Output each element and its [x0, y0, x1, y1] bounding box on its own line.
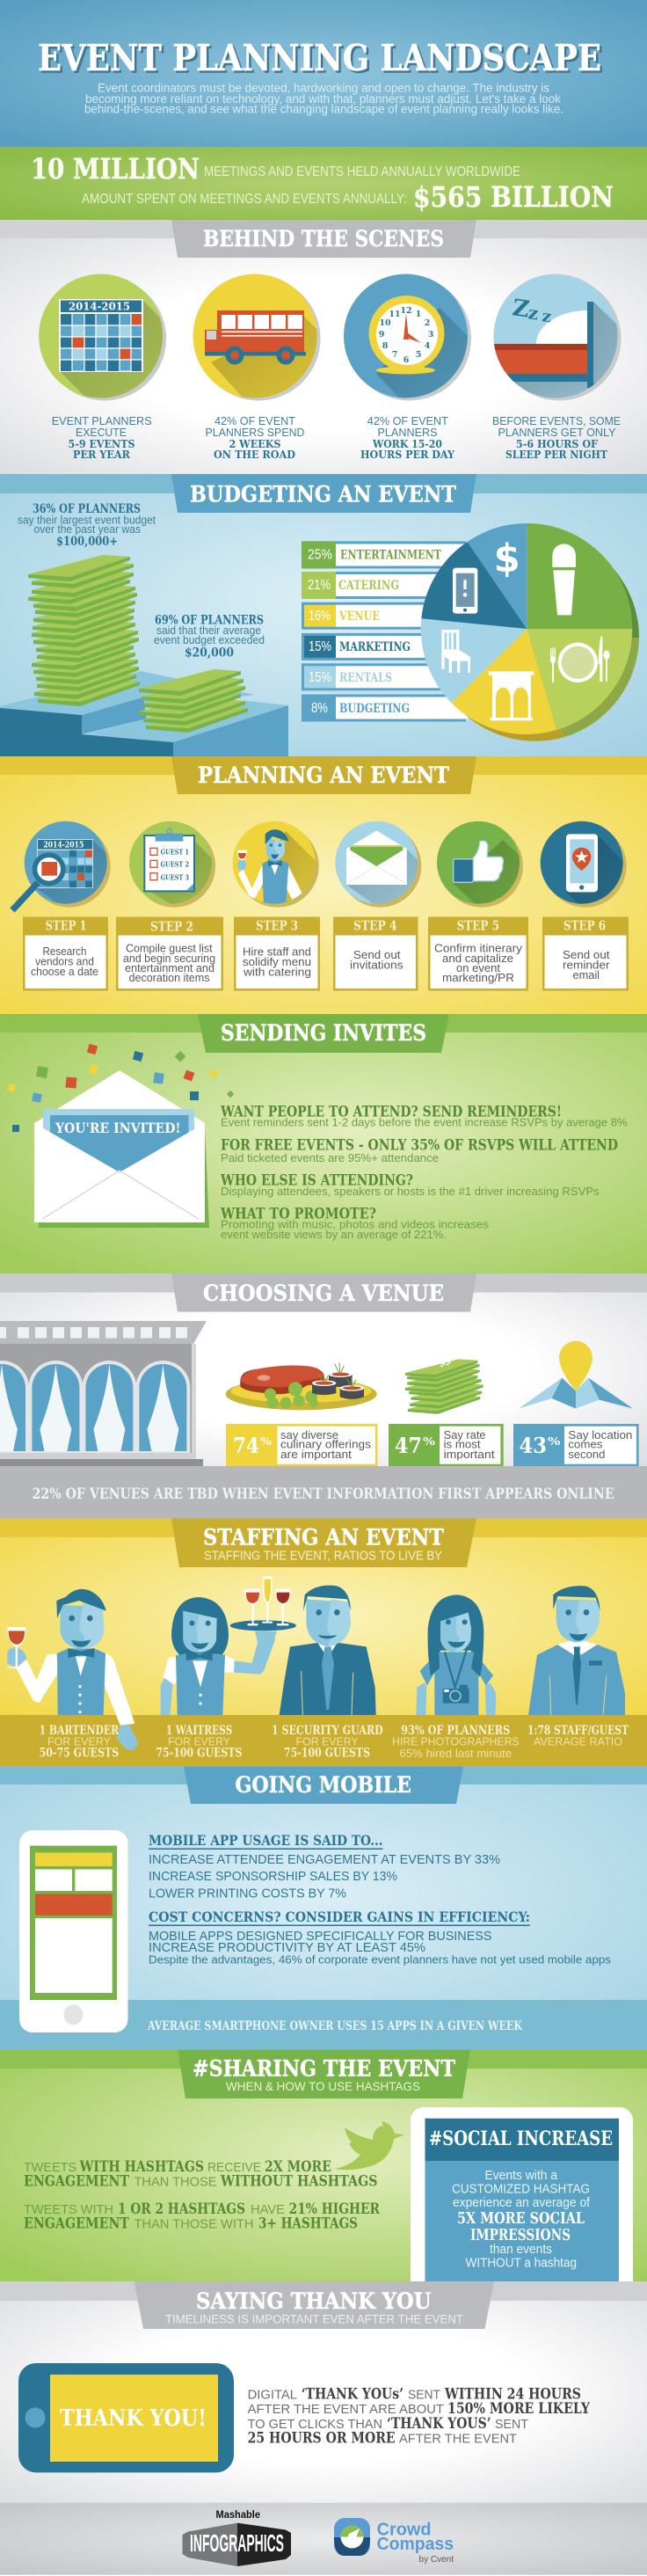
caption: waitress ratio: FOR EVERY — [168, 1735, 230, 1748]
text: hashtag engagement: 21% HIGHER — [289, 2200, 381, 2218]
icon: clock circle: 7 — [392, 350, 397, 360]
stat: culinary: are important — [280, 1448, 352, 1461]
caption: hours per day: PLANNERS — [378, 426, 438, 439]
icon: clock circle: 12 — [400, 306, 412, 316]
heading: planning: PLANNING AN EVENT — [198, 763, 449, 789]
icon: bed circle: Z — [511, 295, 531, 324]
panel: headline stats: MEETINGS AND EVENTS HELD ANNUALLY WORLDWIDE — [204, 164, 520, 179]
caption: on the road: 42% OF EVENT — [214, 414, 295, 427]
text: invite tips: WHO ELSE IS ATTENDING? — [220, 1171, 413, 1188]
text: cost concerns: COST CONCERNS? CONSIDER GAINS IN EFFICIENCY: — [149, 1908, 530, 1925]
step 4: invitations — [350, 959, 403, 971]
step 4 — [333, 916, 418, 990]
panel: footer — [0, 2503, 647, 2575]
caption: security ratio: FOR EVERY — [296, 1735, 359, 1748]
heading: budgeting — [171, 474, 476, 513]
icon: money stack — [405, 1354, 483, 1414]
icon: clock circle: 2 — [425, 318, 430, 328]
stat: location: comes — [568, 1438, 603, 1451]
money stack: small — [0, 669, 248, 791]
legend row: entertainment: 25% — [308, 548, 332, 563]
panel: going mobile — [0, 1766, 647, 2049]
stat: culinary: 74 — [233, 1433, 259, 1458]
figure: waitress — [161, 1576, 296, 1715]
pie slice: marketing — [421, 542, 527, 629]
logo: mashable infographics: INFOGRAPHICS — [190, 2529, 284, 2557]
icon: guest list clipboard: GUEST 3 — [161, 872, 189, 881]
step 1: Research — [42, 945, 87, 958]
panel: social increase tablet — [411, 2107, 633, 2281]
intro text — [84, 82, 563, 116]
icon: clock circle: 11 — [389, 310, 401, 319]
step 2: Compile guest list — [126, 943, 213, 955]
panel: behind the scenes — [0, 220, 647, 474]
panel: social increase tablet: WITHOUT a hashtag — [466, 2256, 577, 2271]
caption: sleep — [492, 414, 621, 461]
text: thank you timing: ‘THANK YOUs’ — [302, 2386, 403, 2403]
text: app usage benefits: LOWER PRINTING COSTS BY 7% — [149, 1886, 346, 1901]
text: cost concerns — [149, 1908, 611, 1967]
caption: sleep: BEFORE EVENTS, SOME — [492, 414, 621, 427]
step 3: STEP 3 — [256, 917, 298, 933]
panel: social increase tablet: experience an average of — [453, 2195, 591, 2210]
text: 69 percent of planners: 69% OF PLANNERS — [155, 614, 264, 628]
icon: clock circle — [344, 274, 471, 401]
panel: saying thank you — [0, 2281, 647, 2503]
logo: mashable infographics: Mashable — [216, 2508, 260, 2521]
heading: choosing a venue — [171, 1273, 476, 1312]
step 4: STEP 4 — [353, 917, 397, 933]
legend row: rentals: 15% — [309, 670, 331, 685]
text: 36 percent of planners: 36% OF PLANNERS — [33, 502, 141, 516]
icon: bed circle: z — [527, 302, 540, 325]
caption: hours per day — [360, 414, 455, 461]
icon: clock circle: 5 — [416, 350, 421, 360]
legend row: entertainment: ENTERTAINMENT — [340, 549, 441, 563]
heading: sending invites: SENDING INVITES — [221, 1020, 426, 1047]
text: cost concerns: INCREASE PRODUCTIVITY BY AT LEAST 45% — [149, 1940, 425, 1955]
panel: planning an event — [0, 756, 647, 1014]
caption: events per year: EVENT PLANNERS — [52, 414, 152, 427]
text: hashtag engagement: 2X MORE — [265, 2158, 331, 2176]
heading: going mobile: GOING MOBILE — [236, 1772, 411, 1799]
panel: headline stats: $565 BILLION — [413, 180, 614, 214]
heading: planning — [171, 756, 476, 794]
stat: location: second — [568, 1448, 605, 1461]
heading: sharing: #SHARING THE EVENT — [193, 2056, 455, 2083]
stat: location: 43 — [519, 1433, 547, 1458]
caption: staff guest ratio — [527, 1724, 629, 1748]
text: thank you timing — [248, 2386, 590, 2447]
panel: headline stats — [0, 147, 647, 220]
heading: saying thank you — [134, 2281, 494, 2329]
legend row: entertainment — [302, 541, 468, 568]
caption: events per year — [52, 414, 152, 461]
icon: invitation envelope — [34, 1070, 209, 1228]
icon: building — [489, 671, 534, 720]
logo: crowd compass — [334, 2518, 454, 2565]
text: invite tips: WANT PEOPLE TO ATTEND? SEND REMINDERS! — [220, 1104, 562, 1120]
stat: rate: Say rate — [444, 1428, 486, 1441]
icon: guest list clipboard: GUEST 2 — [161, 860, 189, 869]
caption: security ratio: 75-100 GUESTS — [284, 1746, 370, 1760]
panel: social increase tablet: CUSTOMIZED HASHTAG — [452, 2182, 590, 2197]
text: thank you timing: WITHIN 24 HOURS — [444, 2386, 581, 2403]
heading: sharing — [178, 2049, 470, 2098]
text: hashtag engagement: WITHOUT HASHTAGS — [220, 2173, 378, 2191]
caption: security ratio — [272, 1724, 383, 1760]
icon: bed circle — [494, 274, 621, 401]
caption: staff guest ratio: AVERAGE RATIO — [534, 1735, 622, 1748]
pie slice: budgeting — [468, 523, 527, 629]
step 3: Hire staff and — [243, 946, 311, 959]
text: hashtag engagement: TWEETS — [24, 2160, 76, 2175]
text: 36 percent of planners: over the past year was — [33, 523, 141, 536]
text: hashtag engagement: THAN THOSE — [134, 2175, 216, 2190]
icon: clock circle: 6 — [403, 355, 410, 365]
icon: dollar: $ — [494, 536, 520, 580]
icon: invitation envelope — [335, 821, 422, 908]
caption: on the road: 2 WEEKS — [229, 437, 281, 450]
stat: location: Say location — [568, 1428, 632, 1441]
heading: sharing: WHEN & HOW TO USE HASHTAGS — [226, 2079, 420, 2093]
step 3 — [234, 916, 320, 990]
text: thank you timing: AFTER THE EVENT — [399, 2431, 517, 2447]
text: hashtag engagement: 3+ HASHTAGS — [258, 2215, 358, 2232]
text: thank you timing: DIGITAL — [248, 2388, 297, 2403]
icon: calendar circle — [39, 274, 167, 401]
text: hashtag engagement: WITH HASHTAGS — [79, 2158, 204, 2176]
stat: location: % — [548, 1435, 561, 1448]
icon: research calendar — [10, 821, 111, 913]
icon: calendar circle: 2014-2015 — [69, 301, 130, 313]
heading: staffing: STAFFING THE EVENT, RATIOS TO LIVE BY — [204, 1548, 442, 1564]
icon: twitter bird — [335, 2121, 404, 2170]
text: hashtag engagement: TWEETS WITH — [24, 2202, 113, 2217]
step 5: on event — [456, 962, 501, 974]
step 2: entertainment and — [125, 962, 214, 974]
invited label: YOU'RE INVITED! — [55, 1120, 181, 1136]
text: cost concerns: MOBILE APPS DESIGNED SPECIFICALLY FOR BUSINESS — [149, 1929, 492, 1944]
steps illustration — [0, 671, 288, 756]
icon: thank you phone: THANK YOU! — [60, 2405, 207, 2432]
legend row: venue: 16% — [309, 609, 331, 624]
legend row: rentals: RENTALS — [339, 671, 392, 685]
caption: hours per day: HOURS PER DAY — [360, 448, 455, 461]
legend row: marketing: 15% — [309, 639, 331, 654]
text: thank you timing: SENT — [495, 2417, 528, 2432]
caption: security ratio: 1 SECURITY GUARD — [272, 1724, 383, 1738]
panel: social increase tablet: Events with a — [485, 2168, 558, 2183]
panel: budgeting an event — [0, 474, 647, 791]
step 2: decoration items — [128, 972, 209, 984]
text: 36 percent of planners — [18, 502, 156, 549]
stat: culinary: % — [260, 1435, 273, 1448]
legend row: venue: VENUE — [338, 609, 380, 624]
text: 69 percent of planners: said that their average — [156, 624, 261, 637]
step 2: STEP 2 — [150, 919, 193, 935]
step 2 — [116, 916, 223, 990]
legend row: catering: 21% — [308, 578, 331, 593]
panel: headline stats: AMOUNT SPENT ON MEETINGS AND EVENTS ANNUALLY: — [82, 192, 407, 207]
step 5: STEP 5 — [457, 917, 499, 933]
text: invite tips — [220, 1104, 628, 1241]
icon: clock circle: 3 — [428, 330, 433, 339]
legend row: budgeting: 8% — [311, 701, 328, 716]
legend row: catering: CATERING — [338, 579, 399, 593]
panel: headline stats: 10 MILLION — [31, 152, 200, 186]
caption: waitress ratio — [156, 1724, 242, 1760]
icon: research calendar: 2014-2015 — [43, 841, 84, 850]
stat: rate: % — [423, 1435, 436, 1448]
caption: events per year: 5-9 EVENTS — [69, 437, 135, 450]
legend row: rentals — [302, 663, 468, 690]
legend row: budgeting — [302, 695, 468, 721]
caption: hours per day: 42% OF EVENT — [367, 414, 448, 427]
icon: thank you phone — [18, 2363, 234, 2472]
text: hashtag engagement: ENGAGEMENT — [24, 2173, 129, 2191]
step 1: STEP 1 — [46, 917, 87, 933]
figure: security guard — [280, 1586, 376, 1715]
legend row: catering — [302, 572, 468, 599]
heading: saying thank you: SAYING THANK YOU — [196, 2288, 431, 2315]
text: app usage benefits: INCREASE ATTENDEE ENGAGEMENT AT EVENTS BY 33% — [149, 1852, 500, 1867]
heading: going mobile — [184, 1766, 463, 1804]
legend row: marketing — [302, 633, 468, 660]
panel: social increase tablet: #SOCIAL INCREASE — [429, 2127, 613, 2150]
icon: clock circle: 1 — [416, 310, 421, 319]
stat: culinary: say diverse — [280, 1428, 338, 1441]
caption: events per year: PER YEAR — [73, 448, 131, 461]
caption: photographers: 65% hired last minute — [399, 1748, 512, 1760]
step 6: reminder — [563, 959, 610, 971]
icon: clock circle: 8 — [382, 341, 389, 351]
heading: budgeting: BUDGETING AN EVENT — [190, 482, 456, 508]
panel: header — [0, 0, 647, 147]
intro text: becoming more reliant on technology, and with that, planners must adjust. Let's take a look — [85, 92, 561, 106]
stat: culinary — [226, 1424, 378, 1466]
text: thank you timing: TO GET CLICKS THAN — [248, 2417, 382, 2432]
step 5 — [428, 916, 528, 990]
text: hashtag engagement: THAN THOSE WITH — [134, 2216, 253, 2232]
text: thank you timing: AFTER THE EVENT ARE ABOUT — [248, 2402, 444, 2417]
stat: location — [513, 1424, 639, 1466]
step 1 — [23, 916, 108, 990]
pie slice: venue — [451, 629, 556, 734]
heading: choosing a venue: CHOOSING A VENUE — [203, 1281, 444, 1307]
panel: sharing the event — [0, 2049, 647, 2281]
step 5: Confirm itinerary — [434, 943, 523, 955]
icon: pie glyphs — [441, 536, 610, 720]
icon: bed circle: z — [541, 307, 552, 326]
legend: budget categories — [302, 541, 468, 721]
icon: plate and cutlery — [550, 636, 610, 682]
text: 69 percent of planners: $20,000 — [185, 646, 234, 660]
stat: rate: important — [444, 1448, 495, 1461]
step 1: choose a date — [31, 966, 98, 978]
intro text: Event coordinators must be devoted, hardworking and open to change. The industry is — [98, 82, 549, 95]
figure: photographer — [416, 1594, 496, 1715]
callout: venues TBD — [0, 1466, 647, 1519]
icon: guest list clipboard: GUEST 1 — [161, 848, 189, 857]
text: thank you timing: 25 HOURS OR MORE — [248, 2429, 396, 2447]
text: hashtag engagement: RECEIVE — [207, 2160, 261, 2175]
icon: guest list clipboard — [129, 821, 215, 908]
stat: rate: 47 — [395, 1433, 422, 1458]
caption: bartender ratio: 1 BARTENDER — [40, 1724, 120, 1738]
panel: choosing a venue — [0, 1273, 647, 1519]
step 6 — [542, 916, 629, 990]
text: invite tips: WHAT TO PROMOTE? — [220, 1206, 376, 1222]
text: invite tips: Promoting with music, photos and videos increases — [221, 1219, 489, 1231]
step 1: vendors and — [35, 955, 94, 967]
caption: waitress ratio: 1 WAITRESS — [166, 1724, 232, 1738]
stat: rate — [389, 1424, 504, 1466]
step 6: Send out — [563, 949, 610, 961]
heading: behind the scenes: BEHIND THE SCENES — [203, 226, 444, 252]
pie slice: catering — [527, 629, 632, 730]
icon: food plate — [226, 1362, 377, 1410]
text: invite tips: Event reminders sent 1-2 days before the event increase RSVPs by average 8% — [221, 1116, 628, 1128]
icon: map pin — [519, 1341, 633, 1409]
icon: microphone — [552, 544, 576, 615]
step 5: and capitalize — [442, 952, 513, 965]
caption: bartender ratio: FOR EVERY — [47, 1735, 111, 1748]
text: 69 percent of planners: event budget exceeded — [154, 634, 265, 646]
caption: on the road: PLANNERS SPEND — [206, 426, 304, 439]
heading: staffing — [171, 1518, 476, 1567]
text: thank you timing: SENT — [408, 2388, 440, 2403]
step 2: and begin securing — [123, 952, 215, 965]
caption: sleep: SLEEP PER NIGHT — [505, 448, 608, 461]
icon: app phone — [19, 1830, 128, 2032]
step 5: marketing/PR — [442, 972, 514, 984]
heading: saying thank you: TIMELINESS IS IMPORTANT EVEN AFTER THE EVENT — [165, 2312, 463, 2326]
caption: on the road — [206, 414, 304, 461]
panel: social increase tablet: than events — [490, 2242, 552, 2257]
step 4: Send out — [353, 949, 401, 961]
legend row: budgeting: BUDGETING — [339, 702, 410, 716]
logo: crowd compass: by Cvent — [418, 2554, 454, 2565]
intro text: behind-the-scenes, and see what the changing landscape of event planning really looks like. — [84, 103, 563, 116]
step 6: STEP 6 — [563, 917, 606, 933]
caption: photographers: HIRE PHOTOGRAPHERS — [392, 1735, 520, 1748]
icon: money stack: $$ — [439, 1354, 454, 1370]
caption: bartender ratio: 50-75 GUESTS — [40, 1746, 119, 1760]
text: thank you timing: ‘THANK YOUS’ — [387, 2415, 491, 2432]
band: staffing stats background — [0, 1715, 647, 1766]
pie chart: budget share — [421, 523, 639, 741]
caption: waitress ratio: 75-100 GUESTS — [156, 1746, 242, 1760]
panel: sending invites — [0, 1014, 647, 1273]
panel: staffing an event — [0, 1518, 647, 1766]
caption: on the road: ON THE ROAD — [214, 448, 295, 461]
text: app usage benefits — [149, 1832, 500, 1901]
caption: sleep: PLANNERS GET ONLY — [498, 426, 616, 439]
panel: social increase tablet: 5X MORE SOCIAL — [457, 2210, 585, 2228]
caption: events per year: EXECUTE — [76, 426, 127, 439]
text: 36 percent of planners: say their largest event budget — [18, 514, 156, 526]
heading: sending invites — [198, 1014, 449, 1053]
text: thank you timing: 150% MORE LIKELY — [447, 2400, 590, 2417]
logo: crowd compass: Crowd — [377, 2521, 432, 2540]
text: app usage benefits: MOBILE APP USAGE IS SAID TO... — [149, 1832, 383, 1849]
step 6: email — [573, 969, 600, 982]
caption: bartender ratio — [40, 1724, 120, 1760]
logo: crowd compass: Compass — [377, 2535, 454, 2554]
panel: social increase tablet: IMPRESSIONS — [470, 2227, 571, 2244]
heading: behind the scenes — [171, 220, 476, 258]
pie slice: entertainment — [527, 523, 632, 629]
step 3: with catering — [243, 966, 311, 978]
icon: clock circle: 4 — [425, 341, 431, 351]
icon: thumbs up — [437, 821, 523, 908]
caption: photographers: 93% OF PLANNERS — [401, 1724, 510, 1738]
icon: staff member — [232, 821, 319, 908]
text: invite tips: Displaying attendees, speakers or hosts is the #1 driver increasing RSVPs — [221, 1186, 600, 1198]
figure: staff member — [528, 1586, 625, 1715]
text: invite tips: event website views by an average of 221%. — [221, 1229, 447, 1241]
text: hashtag engagement — [24, 2158, 381, 2232]
text: hashtag engagement: 1 OR 2 HASHTAGS — [118, 2200, 245, 2218]
text: cost concerns: Despite the advantages, 46% of corporate event planners have not yet used mobile apps — [149, 1954, 611, 1967]
confetti — [7, 1044, 234, 1132]
text: 69 percent of planners — [154, 614, 265, 660]
icon: reminder phone — [540, 821, 627, 908]
stat: rate: is most — [444, 1438, 481, 1451]
caption: sleep: 5-6 HOURS OF — [516, 437, 598, 450]
legend row: venue — [302, 602, 468, 630]
pie slice: rentals — [421, 618, 527, 703]
legend row: marketing: MARKETING — [339, 640, 411, 654]
logo: mashable infographics — [183, 2508, 291, 2566]
text: 36 percent of planners: $100,000+ — [56, 535, 118, 549]
caption: hours per day: WORK 15-20 — [372, 437, 442, 450]
figure: bartender — [5, 1589, 138, 1750]
heading: staffing: STAFFING AN EVENT — [203, 1525, 444, 1551]
icon: bus circle — [193, 274, 320, 401]
stat: culinary: culinary offerings — [280, 1438, 372, 1451]
icon: clock circle: 10 — [379, 318, 391, 328]
step 3: solidify menu — [243, 956, 311, 968]
text: app usage benefits: INCREASE SPONSORSHIP SALES BY 13% — [149, 1869, 397, 1884]
caption: photographers — [392, 1724, 520, 1760]
callout: apps per week: AVERAGE SMARTPHONE OWNER USES 15 APPS IN A GIVEN WEEK — [147, 2019, 523, 2033]
text: hashtag engagement: HAVE — [251, 2202, 285, 2217]
icon: clock circle: 9 — [379, 330, 385, 339]
icon: phone — [453, 568, 477, 614]
text: hashtag engagement: ENGAGEMENT — [24, 2215, 129, 2232]
illustration: venue building — [0, 1321, 207, 1466]
money stack: large — [0, 555, 140, 706]
icon: chair — [441, 630, 470, 673]
text: invite tips: Paid ticketed events are 95%+ attendance — [221, 1152, 439, 1164]
